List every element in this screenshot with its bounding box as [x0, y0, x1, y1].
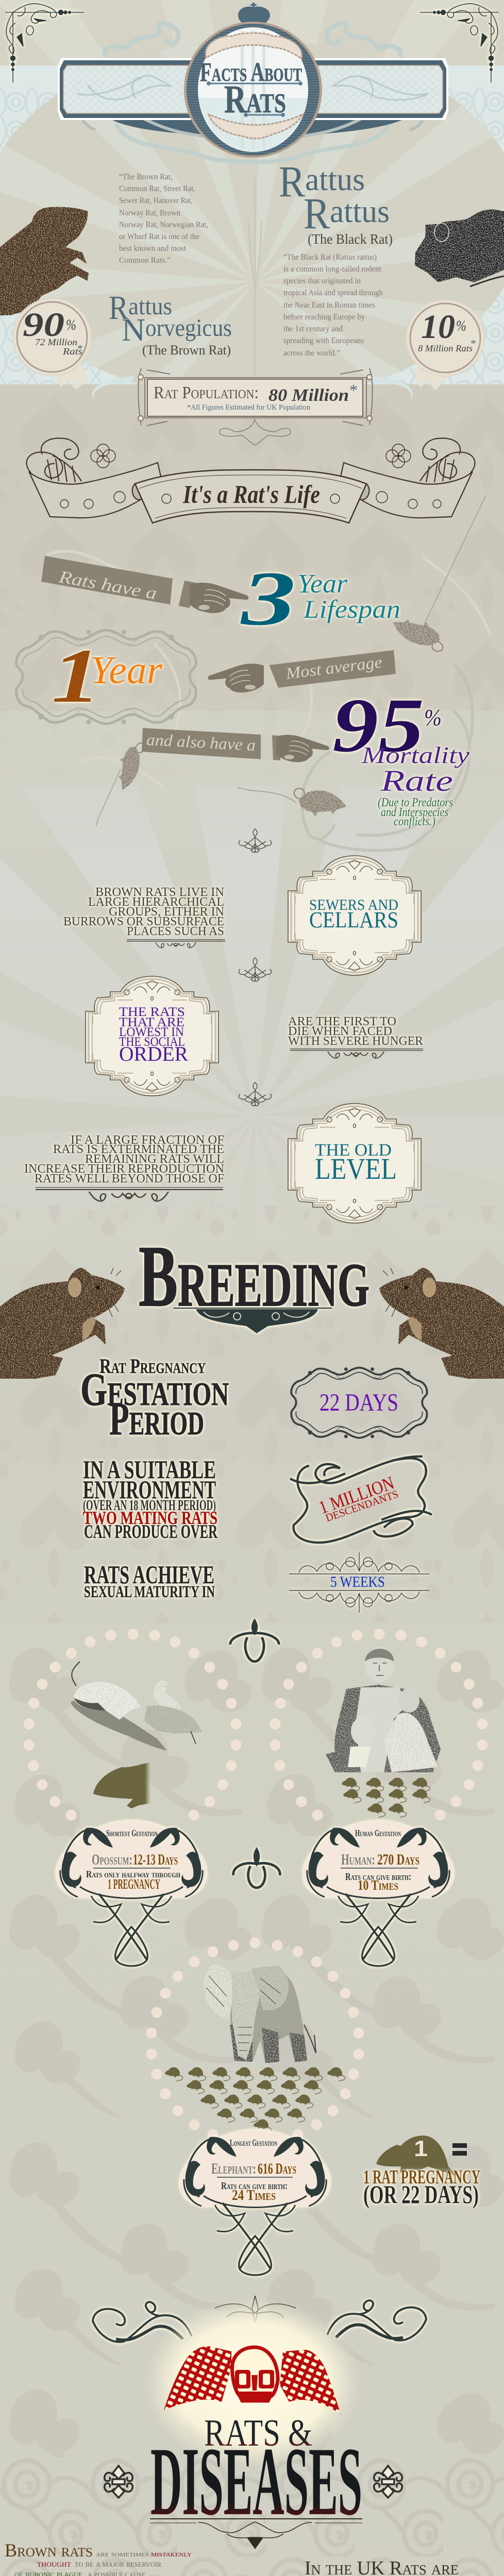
text: mating rats: IN A SUITABLE: [83, 1455, 216, 1484]
heading: Rattus Rattus: R: [279, 157, 306, 206]
pointing hand: most average: [208, 650, 396, 692]
population plaque: *: [349, 381, 358, 399]
ornament: 5 weeks: [289, 1552, 429, 1613]
badge: longest gestation: Longest Gestation: [230, 2138, 277, 2148]
dot ring: elephant: [146, 1937, 364, 2140]
stat: 1 year: 1: [52, 633, 101, 719]
text: brown rat description: Norway Rat, Norwegian Rat,: [119, 221, 208, 229]
text: brown rats live: BROWN RATS LIVE IN: [95, 886, 224, 899]
rosette: 10% black rats: *: [471, 337, 476, 350]
knot ornament 2: [239, 958, 271, 981]
stat: 3 year lifespan: Lifespan: [303, 595, 400, 623]
badge: human gestation: Human Gestation: [355, 1828, 401, 1838]
text: brown rats and plague: mistakenly: [151, 2550, 192, 2558]
equation: one rat pregnancy: [363, 2136, 480, 2209]
stat: 95% mortality: [332, 683, 470, 828]
stat: 95% mortality: Mortality: [361, 742, 470, 768]
plaque: lowest in social order: THE RATS: [119, 1005, 185, 1019]
stat: 1 million descendants: DESCENDANTS: [324, 1488, 400, 1524]
badge: longest gestation: [180, 2130, 330, 2275]
badge: longest gestation: Elephant:: [211, 2160, 256, 2177]
stat: 1 year: [52, 633, 162, 719]
stat: 22 days: 22 DAYS: [320, 1389, 398, 1416]
pointing hand: rats have a: Rats have a: [57, 567, 158, 603]
skull: [232, 2347, 278, 2401]
oval medallion: [184, 22, 322, 158]
text: black rat description: tropical Asia and spread through: [283, 289, 383, 297]
pointing hand: and also have a: [142, 728, 329, 762]
rosette: 90% brown rats: *: [77, 342, 83, 355]
rule and flourish: [290, 1049, 423, 1058]
text: black rat description: the 1st century and: [283, 325, 343, 333]
badge: shortest gestation: 1 PREGNANCY: [108, 1876, 160, 1892]
vertical pendant decoration: [248, 178, 262, 376]
knot ornament 3: [239, 1082, 271, 1106]
ribbon centre: [135, 470, 366, 523]
badge: shortest gestation: Opossum:: [92, 1851, 132, 1868]
rule and flourish: [127, 940, 225, 948]
skull glow: [144, 2298, 361, 2468]
rosette: 10% black rats: 10: [421, 308, 455, 346]
black rat illustration: [415, 210, 504, 286]
text: mating rats: CAN PRODUCE OVER: [84, 1521, 218, 1543]
rosette: 90% brown rats: 72 Million: [35, 337, 77, 347]
grape wreath top: [206, 33, 302, 59]
heading: rats &: RATS &: [204, 2412, 312, 2454]
text: black rat description: across the world.”: [283, 349, 340, 358]
text: black rat description: spreading with Europeans: [283, 336, 364, 345]
title text: Rats: [224, 78, 286, 121]
text: brown rats live: LARGE HIERARCHICAL: [88, 895, 224, 909]
rosette: 90% brown rats: [13, 298, 91, 389]
rule and flourish: [36, 1188, 223, 1201]
heading: Rattus Rattus: attus: [330, 194, 390, 229]
population plaque: [138, 368, 373, 426]
text: gestation period: Rat Pregnancy: [99, 1354, 206, 1378]
plaque: sewers and cellars: SEWERS AND: [309, 896, 398, 913]
plaque: lowest in social order: LOWEST IN: [119, 1025, 184, 1039]
hanging rat right: [389, 496, 485, 653]
text: brown rats and plague: thought: [37, 2558, 71, 2569]
heading: Rattus Norvegicus: N: [122, 313, 145, 348]
equation: one rat pregnancy: 1: [414, 2136, 428, 2161]
text: sexual maturity: RATS ACHIEVE: [84, 1560, 214, 1589]
ribbon: It's a Rat's Life: [27, 438, 475, 523]
badge: shortest gestation: Shortest Gestation: [106, 1828, 158, 1838]
text: first to die: DIE WHEN FACED: [288, 1025, 392, 1038]
header corner ornament left: [5, 4, 84, 82]
text: black rat description: “The Black Rat (Rattus rattus): [283, 253, 377, 262]
rosette: 90% brown rats: Rats: [62, 346, 82, 357]
text: first to die: WITH SEVERE HUNGER: [288, 1035, 423, 1048]
stat: 3 year lifespan: 3: [240, 556, 296, 641]
text: first to die: ARE THE FIRST TO: [288, 1015, 396, 1028]
dot ring: opossum: [24, 1629, 241, 1821]
heading: Rattus Norvegicus: attus: [128, 293, 172, 320]
heading: breeding: [139, 1228, 369, 1333]
title badge: [58, 3, 448, 162]
heading: Rattus Rattus: (The Black Rat): [308, 231, 393, 247]
brown rat illustration: [0, 207, 89, 315]
ornate frame: 1 year: [16, 630, 196, 724]
stat: 95% mortality: Rate: [380, 764, 453, 798]
title text: Facts About: [200, 58, 302, 87]
small rats under elephant: [165, 2067, 345, 2133]
badge: human gestation: Human:: [341, 1851, 375, 1868]
text: brown rat description: Sewer Rat, Hanover Rat,: [119, 196, 193, 205]
running rat lower: [238, 787, 346, 817]
ribbon wings: [29, 463, 473, 518]
plaque: lowest in social order: THE SOCIAL: [119, 1035, 185, 1049]
elephant engraving: [204, 1965, 316, 2063]
dark crescent under banner: [112, 120, 402, 136]
plaque pendant ornament: [220, 419, 291, 445]
clover details: [60, 444, 441, 509]
text: brown rat description: [119, 173, 208, 265]
heading: Rattus Norvegicus: (The Brown Rat): [142, 343, 231, 358]
badge: human gestation: 10 Times: [358, 1877, 398, 1893]
rosette: 90% brown rats: %: [66, 316, 76, 333]
divider ornament: [215, 2296, 296, 2323]
text: brown rats live: GROUPS, EITHER IN: [109, 905, 224, 919]
plaque: the old level: LEVEL: [315, 1152, 397, 1185]
ornate frame: 22 days: [291, 1367, 427, 1438]
ribbon: It's a Rat's Life: It's a Rat's Life: [182, 480, 320, 509]
plaque scroll corners: [138, 368, 373, 426]
heading: Rattus Norvegicus: [109, 289, 232, 358]
ribbon banner: [58, 58, 448, 120]
badge: longest gestation: 24 Times: [232, 2187, 276, 2204]
backing swirl ornament: [105, 23, 400, 162]
swoosh tails: [92, 376, 413, 402]
stat: 1 million descendants: 1 MILLION: [316, 1472, 397, 1518]
plaque: lowest in social order: THAT ARE: [119, 1015, 184, 1029]
stat: 5 weeks: 5 WEEKS: [330, 1573, 385, 1590]
heading: Rattus Norvegicus: orvegicus: [145, 314, 232, 342]
stat: 1 year: Year: [90, 649, 162, 692]
breeding rat right: [379, 1268, 504, 1379]
badge: human gestation: [303, 1821, 453, 1966]
badge: shortest gestation: [56, 1821, 207, 1966]
flourish frame: 1 million: [290, 1456, 432, 1543]
text: brown rats live: PLACES SUCH AS: [127, 925, 224, 938]
plaque: sewers and cellars: CELLARS: [309, 907, 398, 933]
hanging rat left: [96, 740, 145, 826]
text: brown rat description: best known and most: [119, 244, 187, 253]
stat: 95% mortality: conflicts.): [394, 815, 435, 828]
breeding rat left: [0, 1268, 125, 1379]
text: mating rats: TWO MATING RATS: [83, 1507, 217, 1528]
text: mating rats: ENVIRONMENT: [83, 1475, 216, 1504]
text: mating rats: [83, 1455, 218, 1543]
plaque: lowest in social order: [86, 976, 219, 1096]
flourish right: [327, 2300, 426, 2341]
fleur ornament middle: [233, 1850, 280, 1888]
text: gestation period: Period: [109, 1394, 204, 1445]
fleur ornament top: [230, 1621, 279, 1662]
stat: 95% mortality: and Interspecies: [381, 806, 448, 819]
opossum engraving: [71, 1662, 202, 1751]
half rat silhouette: [93, 1762, 150, 1808]
text: black rat description: the Near East in Roman times: [283, 301, 375, 310]
winged skull: [164, 2346, 341, 2414]
text: brown rat description: or Wharf Rat is one of the: [119, 232, 199, 241]
text: large fraction: RATES WELL BEYOND THOSE OF: [35, 1172, 224, 1185]
text: large fraction: IF A LARGE FRACTION OF: [71, 1133, 224, 1147]
text: black rat description: [283, 253, 383, 358]
text: large fraction: [24, 1133, 224, 1185]
flourish left: [93, 2302, 192, 2342]
rosette: 10% black rats: [406, 300, 484, 391]
text: brown rat description: Common Rats.”: [119, 256, 171, 265]
population plaque: *All Figures Estimated for UK Population: [187, 403, 310, 412]
text: first to die: [288, 1015, 423, 1048]
text: large fraction: REMAINING RATS WILL: [85, 1153, 224, 1166]
dot ring: human: [270, 1629, 488, 1821]
text: mating rats: (OVER AN 18 MONTH PERIOD): [83, 1498, 216, 1514]
plaque: the old level: [288, 1104, 421, 1223]
fleur left: [105, 2466, 132, 2498]
grape wreath bottom: [209, 114, 303, 139]
text: brown rat description: Common Rat, Street Rat,: [119, 184, 195, 193]
stat: 95% mortality: 95: [332, 683, 424, 768]
stat: 3 year lifespan: Year: [297, 569, 348, 599]
text: gestation period: Gestation: [80, 1364, 229, 1415]
text: brown rat description: “The Brown Rat,: [119, 173, 173, 181]
text: gestation period: [80, 1354, 229, 1445]
heading: Rattus Rattus: [279, 157, 393, 247]
knot ornament 1: [239, 829, 271, 853]
pointing hand: rats have a: [41, 556, 248, 613]
fleur right: [374, 2466, 402, 2498]
badge: human gestation: 270 Days: [377, 1851, 419, 1868]
text: brown rats and plague: [5, 2540, 203, 2576]
text: sexual maturity: SEXUAL MATURITY IN: [84, 1582, 215, 1601]
ribbon curls: [27, 438, 475, 482]
text: brown rats live: [63, 886, 224, 938]
text: brown rats and plague: to be a major reservoir: [75, 2558, 161, 2569]
woman and children engraving: [326, 1647, 441, 1772]
population plaque: 80 Million: [268, 386, 349, 405]
population plaque: Rat Population:: [154, 383, 259, 402]
text: brown rats and plague: are sometimes: [96, 2550, 149, 2558]
heading: breeding: Breeding: [139, 1228, 369, 1325]
text: large fraction: RATS IS EXTERMINATED THE: [53, 1143, 224, 1156]
text: large fraction: INCREASE THEIR REPRODUCTION: [24, 1162, 224, 1176]
text: black rat description: is a common long-tailed rodent: [283, 265, 382, 274]
badge: human gestation: Rats can give birth:: [345, 1871, 411, 1883]
text: black rat description: species that originated in: [283, 277, 361, 285]
badge: longest gestation: 616 Days: [258, 2160, 296, 2177]
heading: Rattus Rattus: attus: [305, 162, 365, 197]
rosette: 10% black rats: %: [456, 317, 466, 334]
header corner ornament right: [420, 4, 499, 82]
small rats under woman: [342, 1777, 430, 1818]
badge: shortest gestation: Rats only halfway through: [86, 1869, 180, 1880]
text: sexual maturity: [84, 1560, 215, 1601]
title text: [200, 58, 303, 121]
plaque: lowest in social order: ORDER: [119, 1042, 188, 1065]
heading rule ornament: [150, 2519, 362, 2549]
stat: 95% mortality: (Due to Predators: [378, 796, 453, 809]
stat: 3 year lifespan: [240, 556, 400, 641]
wings: [164, 2346, 341, 2414]
pointing hand: most average: Most average: [284, 652, 383, 683]
plaque: the old level: THE OLD: [315, 1141, 392, 1160]
heading: Rattus Norvegicus: R: [109, 289, 128, 327]
badge: shortest gestation: 12-13 Days: [133, 1851, 178, 1868]
text: brown rats live: BURROWS OR SUBSURFACE: [63, 915, 224, 928]
text: black rat description: before reaching Europe by: [283, 313, 365, 321]
crown: [238, 3, 270, 23]
stat: 95% mortality: %: [424, 704, 442, 731]
plaque: sewers and cellars: [288, 856, 421, 975]
text: brown rat description: Norway Rat, Brown: [119, 209, 180, 217]
rosette: 90% brown rats: 90: [23, 306, 64, 344]
rosette: 10% black rats: 8 Million Rats: [418, 343, 473, 353]
text: brown rats and plague: Brown rats: [5, 2540, 93, 2561]
badge: longest gestation: Rats can give birth:: [221, 2180, 288, 2192]
heading: Rattus Rattus: R: [304, 189, 330, 238]
pointing hand: and also have a: and also have a: [146, 730, 256, 754]
